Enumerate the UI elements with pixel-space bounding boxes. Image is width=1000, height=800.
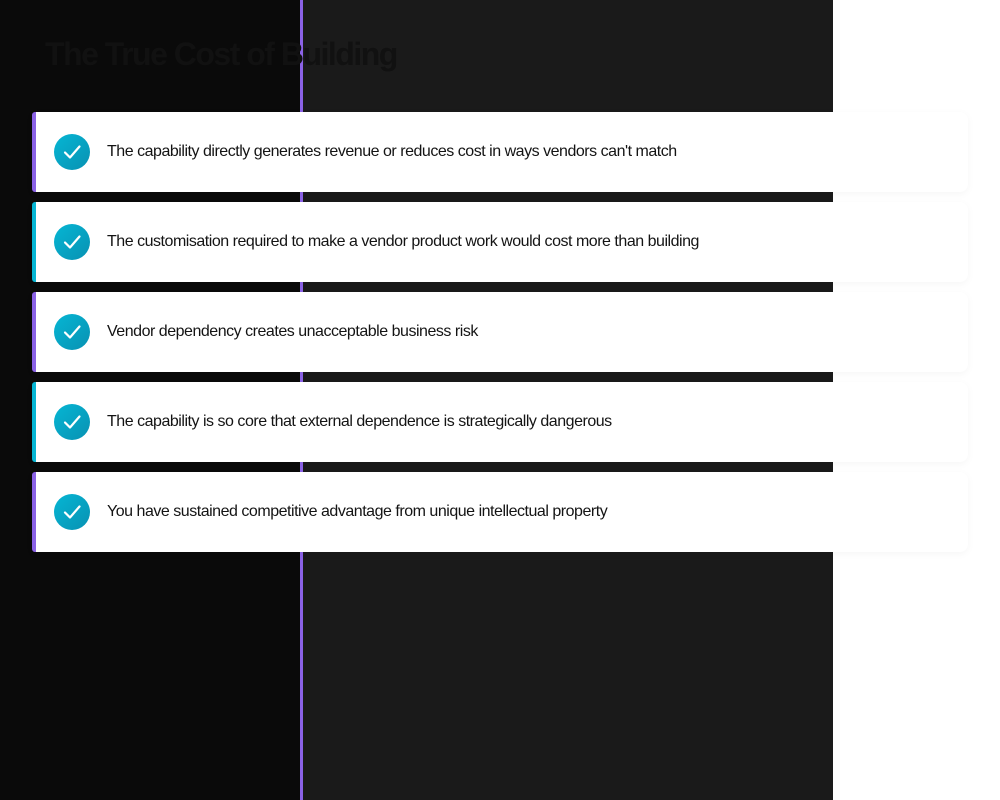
- dark background: right column: [303, 0, 833, 800]
- card 2: [32, 202, 968, 282]
- card 5: [32, 472, 968, 552]
- card text: You have sustained competitive advantage from unique intellectual property: [107, 503, 607, 520]
- card 3: [32, 292, 968, 372]
- card text: Vendor dependency creates unacceptable business risk: [107, 323, 478, 340]
- icon: check: [54, 314, 90, 350]
- icon: check: [54, 494, 90, 530]
- card text: The customisation required to make a vendor product work would cost more than building: [107, 233, 699, 250]
- card 4: [32, 382, 968, 462]
- card text: The capability is so core that external dependence is strategically dangerous: [107, 413, 612, 430]
- purple vertical line: [300, 0, 303, 800]
- card text: The capability directly generates revenue or reduces cost in ways vendors can't match: [107, 143, 677, 160]
- icon: check: [54, 404, 90, 440]
- icon: check: [54, 134, 90, 170]
- icon: check: [54, 224, 90, 260]
- dark background: left column: [0, 0, 300, 800]
- title: The True Cost of Building: [45, 36, 397, 72]
- card 1: [32, 112, 968, 192]
